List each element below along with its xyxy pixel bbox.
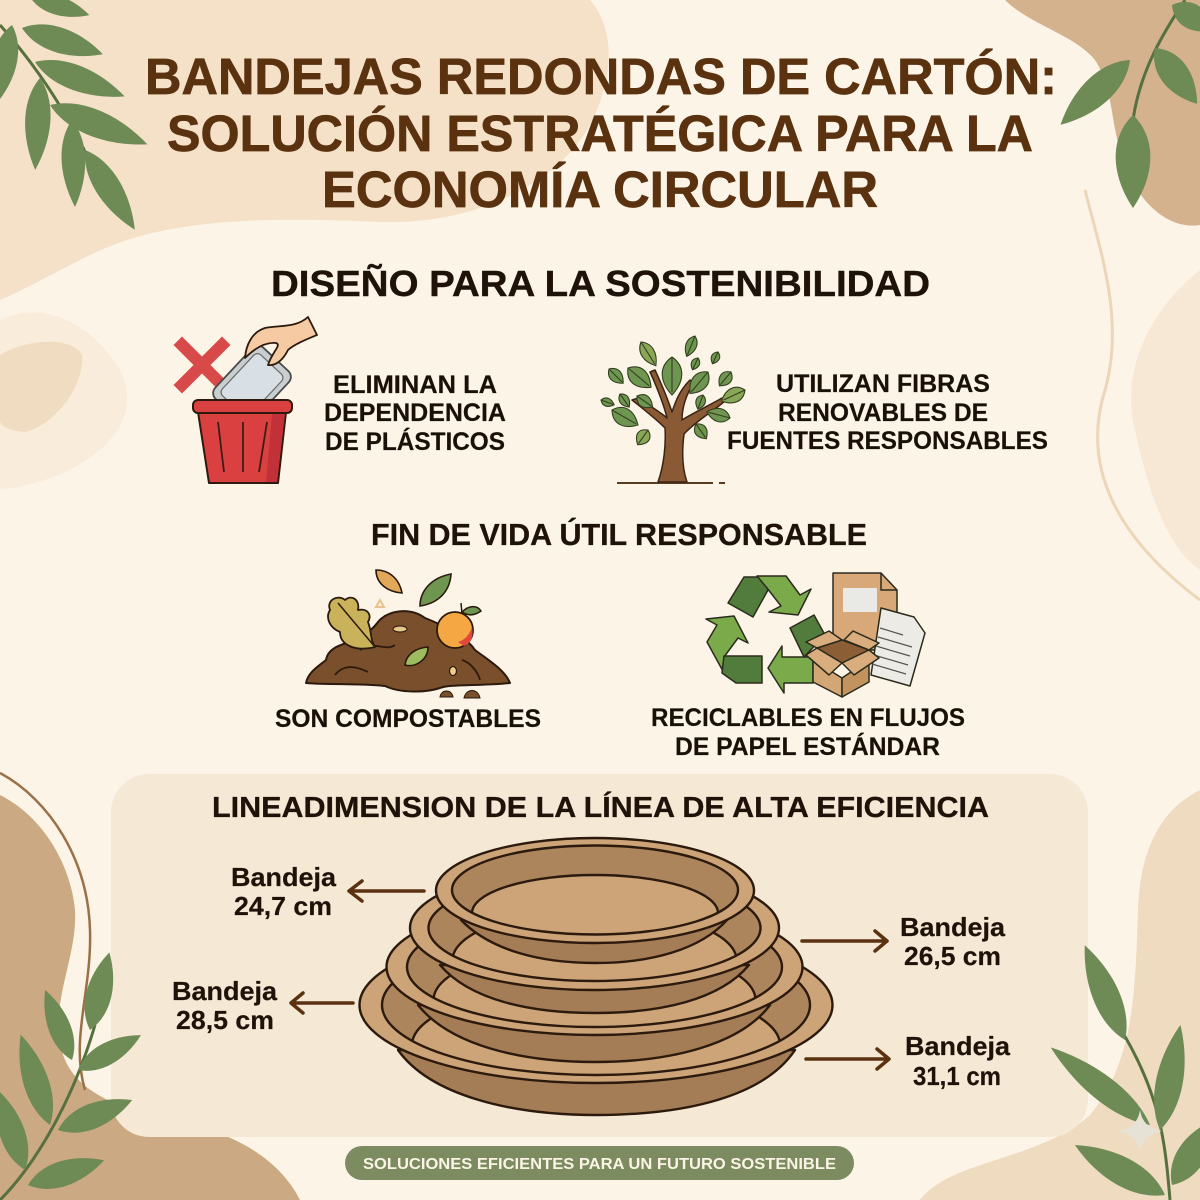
heading: fin de vida útil: FIN DE VIDA ÚTIL RESPONSABLE bbox=[371, 516, 867, 552]
hand bbox=[245, 317, 317, 365]
stacked trays illustration bbox=[360, 838, 832, 1115]
label: compostables: SON COMPOSTABLES bbox=[275, 705, 541, 733]
heading: tray line: LINEADIMENSION DE LA LÍNEA DE ALTA EFICIENCIA bbox=[212, 790, 989, 824]
label: plastics: DE PLÁSTICOS bbox=[325, 427, 505, 456]
label: 31.1 cm bbox=[905, 1031, 1011, 1091]
title: SOLUCIÓN ESTRATÉGICA PARA LA bbox=[167, 105, 1033, 162]
footer pill bbox=[345, 1146, 854, 1180]
title bbox=[145, 48, 1057, 218]
label: 31.1 cm: 31,1 cm bbox=[913, 1061, 1001, 1091]
plastic tray bbox=[210, 342, 294, 428]
label: fibras: FUENTES RESPONSABLES bbox=[727, 427, 1048, 455]
icon: plastic tray into red bin bbox=[182, 317, 317, 483]
icon: recycling symbol, paper and box bbox=[706, 573, 925, 697]
label: 28.5 cm: 28,5 cm bbox=[176, 1005, 274, 1035]
label: 24.7 cm bbox=[231, 862, 337, 921]
title: BANDEJAS REDONDAS DE CARTÓN: bbox=[145, 48, 1057, 105]
small green leaf bbox=[405, 647, 428, 666]
sparkle bbox=[1118, 1110, 1162, 1152]
label: reciclables bbox=[651, 704, 965, 761]
kraft document bbox=[833, 573, 897, 650]
title: ECONOMÍA CIRCULAR bbox=[322, 161, 878, 218]
paper sheet bbox=[871, 608, 925, 686]
label: 24.7 cm: 24,7 cm bbox=[234, 891, 332, 921]
oak leaf bbox=[328, 598, 375, 649]
leaves: bottom right branch bbox=[1043, 940, 1200, 1200]
tray 26.5 cm bbox=[408, 895, 780, 1014]
label: reciclables: DE PAPEL ESTÁNDAR bbox=[675, 732, 940, 761]
icon: tree bbox=[600, 334, 748, 483]
seeds and stones bbox=[450, 666, 456, 676]
bin rim bbox=[193, 400, 292, 413]
panel: tray sizes bbox=[111, 774, 1088, 1137]
label: plastics bbox=[324, 371, 506, 456]
red cross bbox=[182, 345, 222, 385]
apple bbox=[437, 612, 473, 648]
cardboard box bbox=[813, 660, 842, 697]
recycle arrows bbox=[728, 577, 768, 617]
tray 31.1 cm bbox=[358, 966, 834, 1116]
label: plastics: DEPENDENCIA bbox=[324, 399, 506, 427]
tray 28.5 cm bbox=[385, 934, 804, 1064]
arrow: 26.5 cm bbox=[802, 931, 887, 951]
label: 24.7 cm: Bandeja bbox=[231, 862, 337, 892]
label: 26.5 cm: Bandeja bbox=[900, 912, 1006, 942]
label: reciclables: RECICLABLES EN FLUJOS bbox=[651, 704, 965, 732]
label: 28.5 cm bbox=[172, 976, 278, 1035]
icon: compost heap bbox=[306, 570, 510, 698]
arrow: 24.7 cm bbox=[349, 881, 424, 901]
orange leaf bbox=[376, 570, 402, 593]
label: 31.1 cm: Bandeja bbox=[905, 1031, 1011, 1061]
label: 26.5 cm bbox=[900, 912, 1006, 971]
arrow: 31.1 cm bbox=[806, 1049, 889, 1069]
leaves: bottom left branch bbox=[0, 949, 146, 1200]
green leaf bbox=[420, 574, 451, 606]
bin body bbox=[198, 412, 286, 483]
soil mound bbox=[306, 611, 510, 692]
label: fibras: RENOVABLES DE bbox=[778, 399, 988, 427]
heading: diseño para la sostenibilidad: DISEÑO PARA LA SOSTENIBILIDAD bbox=[271, 262, 930, 304]
arrow: 28.5 cm bbox=[291, 993, 353, 1013]
label: plastics: ELIMINAN LA bbox=[333, 371, 497, 399]
small triangle bbox=[376, 600, 384, 607]
label: 26.5 cm: 26,5 cm bbox=[904, 941, 1001, 971]
footer pill: SOLUCIONES EFICIENTES PARA UN FUTURO SOSTENIBLE bbox=[363, 1156, 836, 1173]
label: fibras: UTILIZAN FIBRAS bbox=[776, 370, 990, 398]
leaves: top left branch bbox=[0, 0, 152, 236]
label: 28.5 cm: Bandeja bbox=[172, 976, 278, 1006]
label: fibras bbox=[727, 370, 1048, 455]
tray 24.7 cm bbox=[436, 838, 754, 963]
leaves: top right branch bbox=[1051, 0, 1200, 208]
